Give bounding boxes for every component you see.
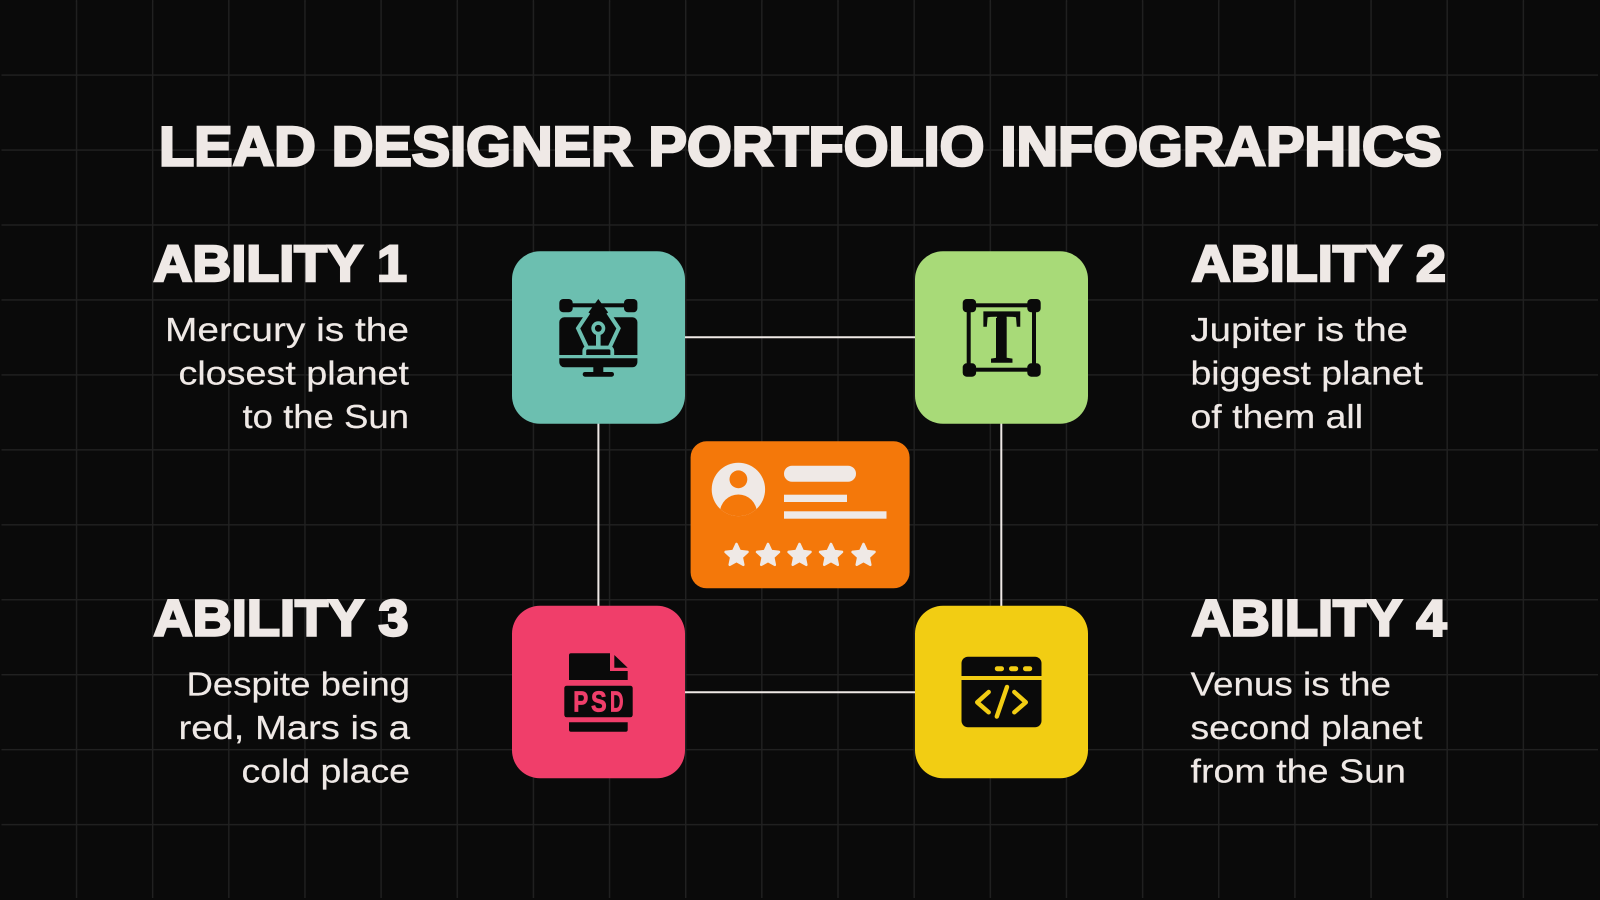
- profile text bars: [784, 466, 886, 519]
- icon: text box with T: T: [983, 295, 1021, 379]
- text block: ability 3 description: Despite being: [186, 666, 410, 704]
- panel: pink PSD tile: [512, 606, 685, 778]
- text block: ability 4 description: Venus is the: [1190, 666, 1391, 704]
- text block: ability 2 description: of them all: [1190, 399, 1363, 436]
- icon: PSD file: D: [610, 686, 624, 718]
- text block: ability 2 description: [1190, 312, 1424, 436]
- icon: avatar: [712, 462, 766, 516]
- heading: ability 1: ABILITY 1: [154, 235, 407, 292]
- panel: teal pen tool tile: [512, 251, 685, 424]
- heading: ability 2: ABILITY 2: [1192, 235, 1446, 292]
- text block: ability 1 description: Mercury is the: [165, 312, 409, 349]
- text block: ability 1 description: to the Sun: [242, 399, 409, 436]
- panel: ability 1 text: [154, 235, 410, 436]
- text block: ability 4 description: [1190, 666, 1423, 790]
- five star rating: [726, 544, 874, 565]
- text block: ability 4 description: from the Sun: [1190, 754, 1406, 790]
- icon: monitor with pen nib: [559, 299, 637, 377]
- panel: ability 3 text: [154, 590, 410, 790]
- panel: yellow code tile: [915, 606, 1088, 778]
- icon: code window: [962, 657, 1042, 727]
- panel: ability 4 text: [1190, 590, 1447, 790]
- connector lines: [598, 337, 1001, 692]
- text block: ability 4 description: second planet: [1190, 710, 1423, 747]
- text block: ability 3 description: cold place: [242, 754, 410, 790]
- text block: ability 3 description: [178, 666, 410, 790]
- text block: ability 1 description: closest planet: [178, 356, 410, 392]
- icon: PSD file: [564, 653, 633, 732]
- text block: ability 1 description: [165, 312, 410, 436]
- icon: text box with T: [963, 295, 1041, 379]
- icon: PSD file: S: [591, 686, 607, 718]
- panel: orange profile card: [691, 441, 910, 588]
- text block: ability 2 description: biggest planet: [1190, 356, 1424, 392]
- title: LEAD DESIGNER PORTFOLIO INFOGRAPHICS: [159, 114, 1442, 178]
- text block: ability 3 description: red, Mars is a: [178, 710, 410, 747]
- panel: ability 2 text: [1190, 235, 1446, 436]
- text block: ability 2 description: Jupiter is the: [1190, 312, 1408, 349]
- heading: ability 4: ABILITY 4: [1192, 590, 1447, 646]
- heading: ability 3: ABILITY 3: [154, 590, 408, 646]
- panel: green type tool tile: [915, 251, 1088, 424]
- icon: PSD file: P: [573, 686, 588, 718]
